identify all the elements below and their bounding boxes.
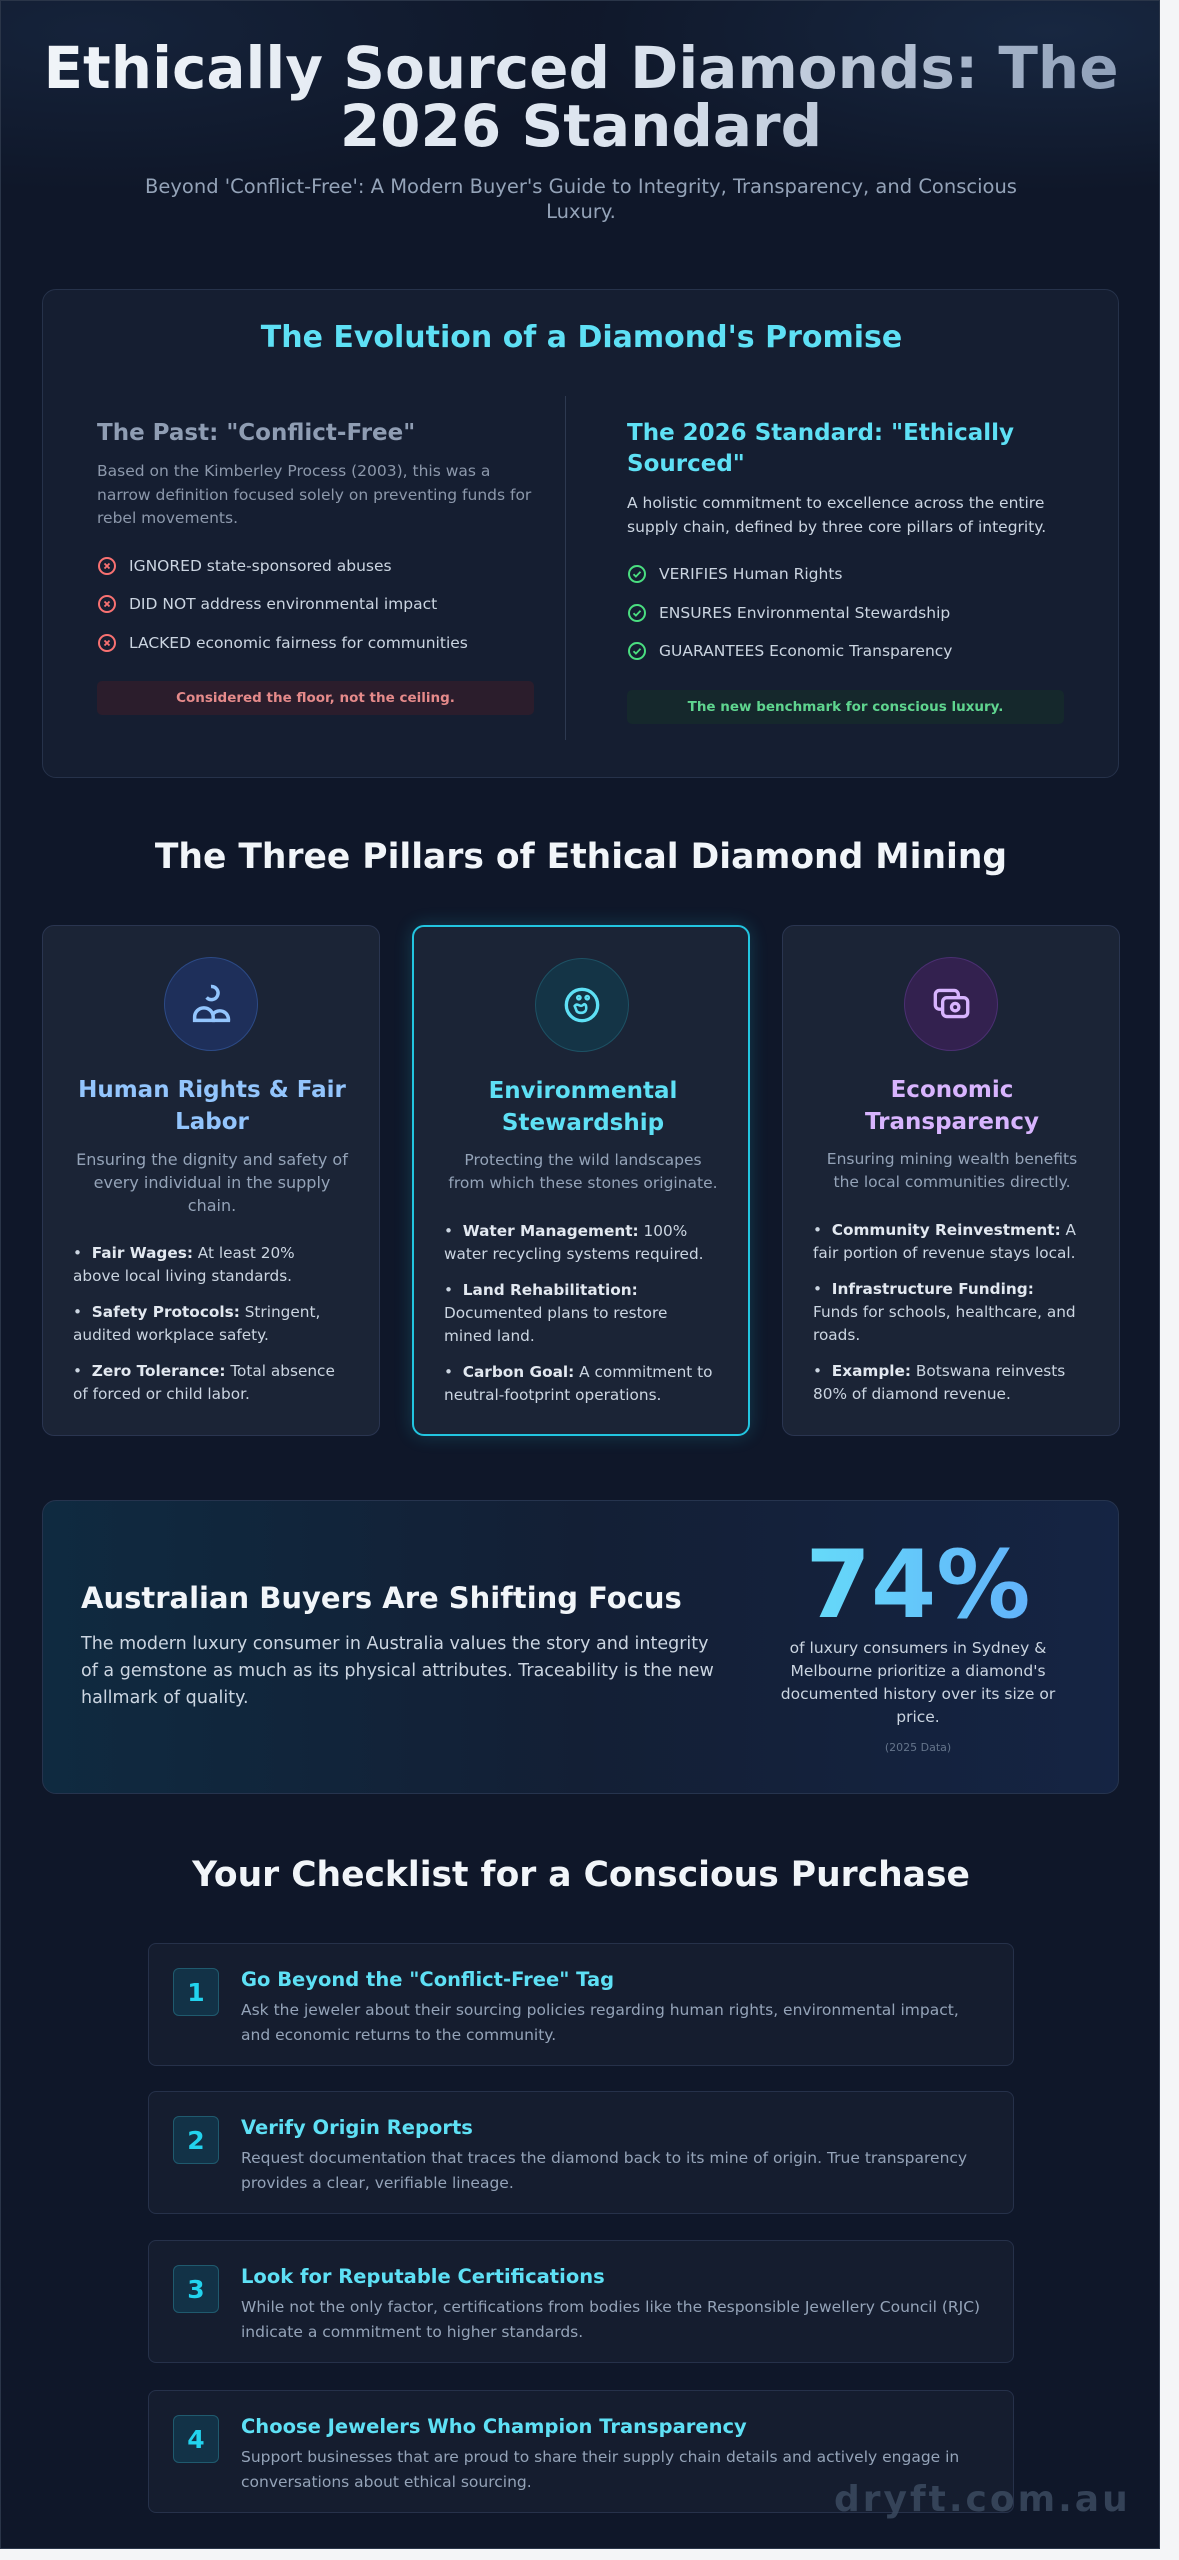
checklist item 1: Ask the jeweler about their sourcing policies regarding human rights, environmental impact, — [241, 2001, 959, 2019]
checklist item 2 — [148, 2091, 1014, 2214]
divider — [565, 396, 566, 740]
2026 text: A holistic commitment to excellence across the entire supply chain, defined by three core pillars of integrity. — [627, 494, 1046, 536]
panel: evolution — [42, 289, 1119, 778]
2026 callout: The new benchmark for conscious luxury. — [688, 698, 1003, 714]
checklist item 3: Look for Reputable Certifications — [241, 2265, 605, 2288]
2026 list: ENSURES Environmental Stewardship — [659, 604, 950, 622]
card bullets — [73, 1244, 335, 1403]
checklist item 3: While not the only factor, certifications from bodies like the Responsible Jewellery Council (RJC) indicate a commitment to higher standards. — [241, 2298, 980, 2341]
card bullets: • Infrastructure Funding: — [813, 1280, 1034, 1298]
big number: 74% — [806, 1531, 1030, 1640]
card title: Human Rights & Fair Labor — [78, 1077, 346, 1135]
past list: LACKED economic fairness for communities — [129, 634, 468, 652]
stat heading: Australian Buyers Are Shifting Focus — [81, 1581, 682, 1615]
card bullets: 80% of diamond revenue. — [813, 1385, 1011, 1403]
checklist item 2: Request documentation that traces the diamond back to its mine of origin. True transparency provides a clear, verifiable lineage. — [241, 2149, 967, 2192]
heading: checklist: Your Checklist for a Conscious Purchase — [192, 1855, 970, 1895]
card bullets: • Safety Protocols: Stringent, audited workplace safety. — [73, 1303, 320, 1344]
icon: money — [904, 957, 998, 1051]
card desc: Ensuring mining wealth benefits the local communities directly. — [827, 1150, 1077, 1191]
checklist item 3: 3 — [187, 2274, 205, 2304]
card: human rights — [42, 925, 380, 1436]
card title: Environmental Stewardship — [489, 1078, 677, 1136]
past text: Based on the Kimberley Process (2003), this was a narrow definition focused solely on preventing funds for rebel movements. — [97, 462, 531, 527]
2026 list: GUARANTEES Economic Transparency — [659, 642, 952, 660]
2026 list: VERIFIES Human Rights — [659, 565, 843, 583]
big number — [733, 1533, 1103, 1639]
title: 2026 Standard — [340, 92, 822, 160]
past list: DID NOT address environmental impact — [129, 595, 437, 613]
checklist item 3 — [148, 2240, 1014, 2363]
checklist item 1: Go Beyond the "Conflict-Free" Tag — [241, 1968, 614, 1991]
heading: three pillars: The Three Pillars of Ethical Diamond Mining — [155, 837, 1007, 877]
panel heading: The Evolution of a Diamond's Promise — [261, 320, 902, 355]
card: economic — [782, 925, 1120, 1436]
card bullets: • Fair Wages: At least 20% above local living standards. — [73, 1244, 295, 1285]
icon: person — [164, 957, 258, 1051]
card bullets — [813, 1221, 1076, 1403]
past list: IGNORED state-sponsored abuses — [129, 557, 392, 575]
checklist item 1 — [148, 1943, 1014, 2066]
icon: earth — [535, 958, 629, 1052]
card desc: Protecting the wild landscapes from which these stones originate. — [448, 1151, 718, 1192]
source: (2025 Data) — [885, 1741, 951, 1754]
past list — [98, 557, 468, 652]
past callout: Considered the floor, not the ceiling. — [176, 690, 455, 706]
subtitle: Beyond 'Conflict-Free': A Modern Buyer's Guide to Integrity, Transparency, and Conscious Luxury. — [145, 175, 1017, 223]
card title: Economic Transparency — [865, 1077, 1039, 1135]
past heading: The Past: "Conflict-Free" — [97, 420, 415, 446]
card bullets: • Example: Botswana reinvests — [813, 1362, 1065, 1380]
checklist item 2: Verify Origin Reports — [241, 2116, 473, 2139]
column: 2026 — [627, 420, 1064, 724]
card: environmental — [412, 925, 750, 1436]
card bullets: • Community Reinvestment: A fair portion of revenue stays local. — [813, 1221, 1076, 1262]
2026 callout — [627, 690, 1064, 724]
card bullets: • Zero Tolerance: Total absence of forced or child labor. — [73, 1362, 335, 1403]
checklist item 4: Support businesses that are proud to share their supply chain details and actively engage in conversations about ethical sourcing. — [241, 2448, 959, 2491]
past callout — [97, 681, 534, 715]
card bullets: • Water Management: 100% water recycling systems required. — [444, 1222, 704, 1263]
stat caption: of luxury consumers in Sydney & Melbourne prioritize a diamond's documented history over its size or price. — [781, 1639, 1055, 1726]
card bullets — [444, 1222, 712, 1404]
checklist item 4: Choose Jewelers Who Champion Transparency — [241, 2415, 747, 2438]
panel: australian buyers stat — [42, 1500, 1119, 1794]
title: Ethically Sourced Diamonds: The — [43, 34, 1119, 102]
checklist item 1: 1 — [187, 1978, 205, 2006]
card bullets: roads. — [813, 1326, 860, 1344]
checklist item 2: 2 — [187, 2126, 205, 2154]
card bullets: • Carbon Goal: A commitment to neutral-footprint operations. — [444, 1363, 712, 1404]
stat text: The modern luxury consumer in Australia values the story and integrity of a gemstone as much as its physical attributes. Traceability is the new hallmark of quality. — [81, 1634, 714, 1708]
card bullets: Funds for schools, healthcare, and — [813, 1303, 1076, 1321]
checklist item 4: 4 — [187, 2424, 205, 2454]
title — [11, 39, 1151, 155]
card desc: Ensuring the dignity and safety of every individual in the supply chain. — [76, 1150, 348, 1215]
card bullets: • Land Rehabilitation: Documented plans to restore mined land. — [444, 1281, 667, 1345]
column: past — [97, 420, 534, 715]
2026 heading: The 2026 Standard: "Ethically Sourced" — [627, 420, 1014, 477]
checklist item 4 — [148, 2390, 1014, 2513]
watermark: dryft.com.au — [834, 2479, 1131, 2520]
checklist item 1: and economic returns to the community. — [241, 2026, 556, 2044]
2026 list — [628, 565, 952, 660]
